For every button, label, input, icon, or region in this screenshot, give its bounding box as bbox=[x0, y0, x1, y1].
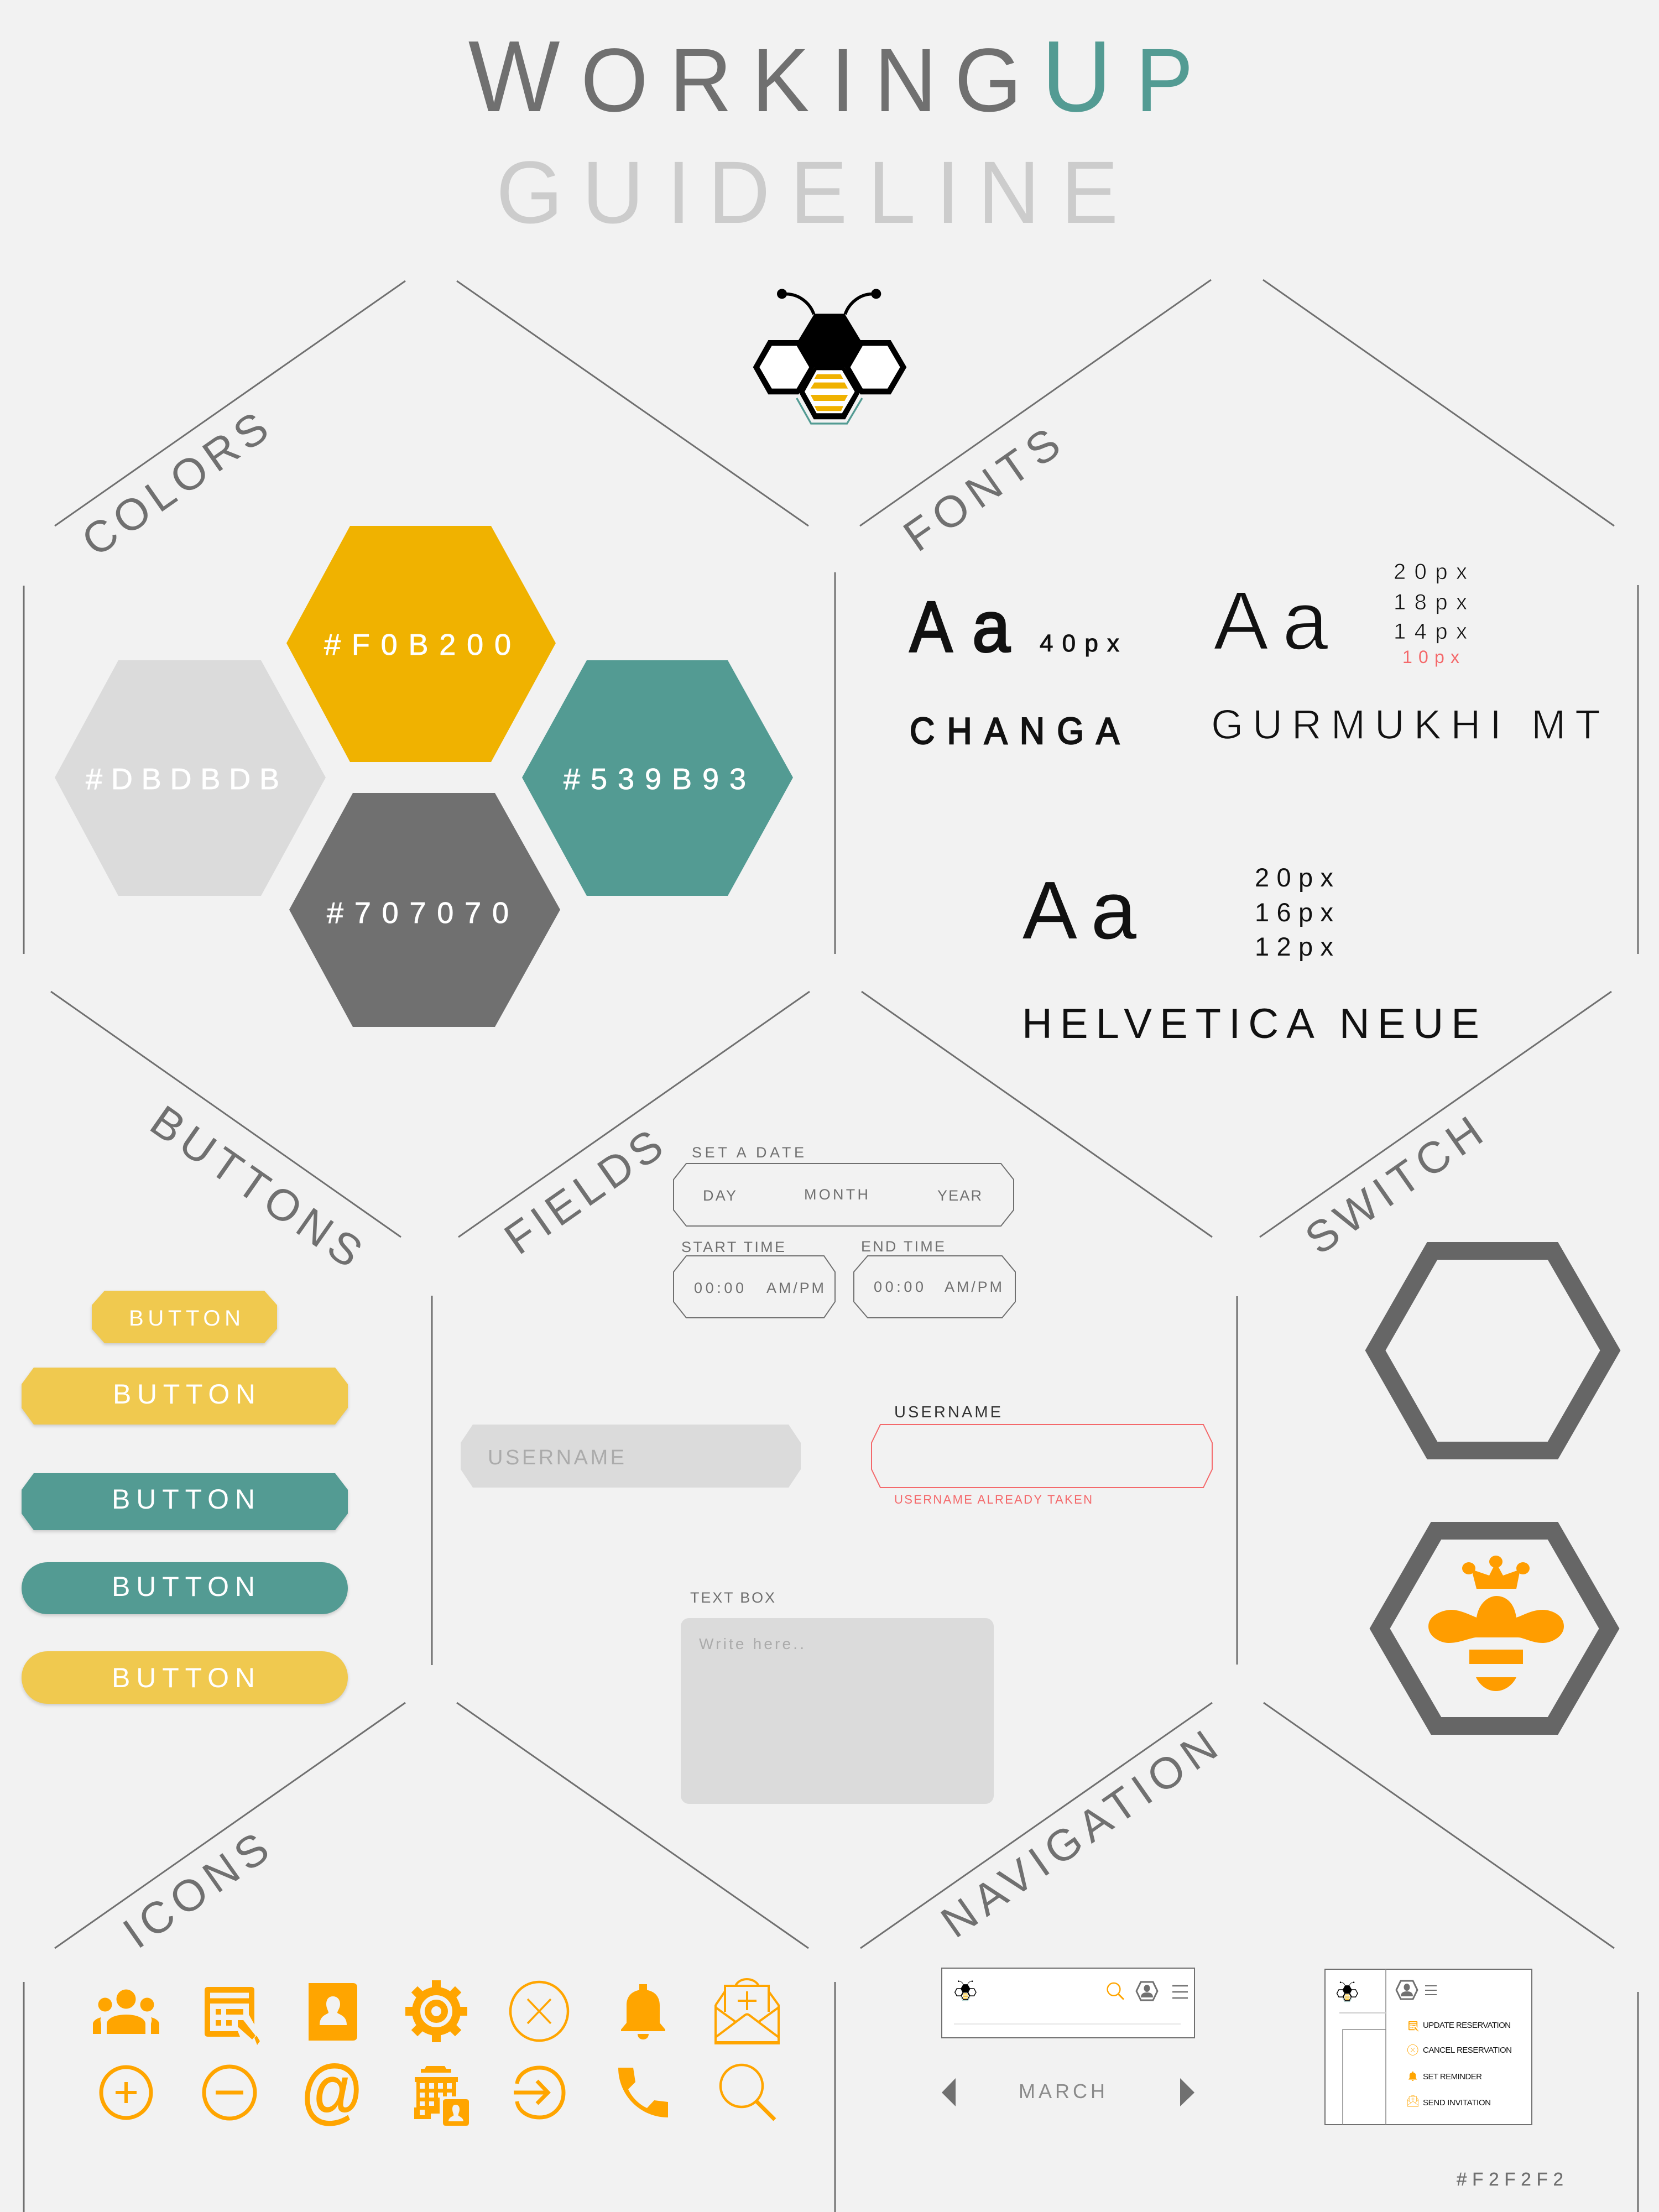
panel: icons bbox=[93, 1979, 780, 2131]
font sample: Gurmukhi MT: 20px bbox=[1394, 560, 1467, 584]
field: username error bbox=[872, 1404, 1212, 1506]
field: start time: AM/PM bbox=[766, 1280, 824, 1296]
icon: form edit bbox=[205, 1987, 260, 2045]
panel: colour swatches bbox=[55, 526, 793, 1027]
icon: minus circle bbox=[204, 2067, 255, 2119]
field: start time: 00:00 bbox=[694, 1280, 744, 1296]
button: large teal bbox=[22, 1473, 348, 1530]
icon: close circle bbox=[510, 1982, 568, 2041]
field: set a date bbox=[674, 1144, 1014, 1226]
heading: switch: SWITCH bbox=[1296, 1107, 1491, 1264]
field: text box: Write here.. bbox=[699, 1635, 804, 1652]
icon: queen bee bbox=[1428, 1556, 1564, 1691]
font sample: Gurmukhi MT: 10px bbox=[1402, 647, 1459, 667]
font sample: Helvetica Neue: Aa bbox=[1022, 865, 1137, 956]
icon: menu bbox=[1172, 1986, 1188, 1998]
nav: side menu mockup bbox=[1325, 1969, 1532, 2125]
icon: menu bbox=[1425, 1986, 1437, 1995]
button: large yellow: BUTTON bbox=[113, 1379, 255, 1410]
nav: month selector bbox=[942, 2078, 1194, 2106]
field: end time bbox=[854, 1238, 1015, 1318]
subtitle: Guideline bbox=[496, 143, 1118, 242]
icon: small logo bbox=[1337, 1981, 1358, 2002]
button: small yellow: BUTTON bbox=[129, 1306, 241, 1331]
field: set a date: YEAR bbox=[937, 1187, 982, 1204]
heading: fonts: FONTS bbox=[895, 419, 1069, 561]
heading: buttons: BUTTONS bbox=[142, 1096, 371, 1277]
font sample: Changa bbox=[910, 586, 1119, 752]
field: set a date: DAY bbox=[703, 1187, 736, 1204]
field: set a date: MONTH bbox=[804, 1186, 868, 1203]
menu item: send invitation bbox=[1407, 2095, 1491, 2107]
icon: search bbox=[721, 2065, 775, 2120]
button: large yellow bbox=[22, 1368, 348, 1425]
swatch: 539B93 bbox=[522, 660, 793, 896]
field: end time: AM/PM bbox=[945, 1279, 1002, 1295]
font sample: Gurmukhi MT: 18px bbox=[1394, 590, 1467, 614]
field: username filled bbox=[461, 1425, 801, 1488]
swatch: 707070: #707070 bbox=[327, 896, 509, 930]
swatch: F0B200: #F0B200 bbox=[324, 628, 511, 661]
icon: phone bbox=[618, 2068, 668, 2117]
heading: navigation: NAVIGATION bbox=[932, 1721, 1226, 1947]
menu item: set reminder: SET REMINDER bbox=[1423, 2072, 1482, 2081]
heading: fields: FIELDS bbox=[495, 1120, 671, 1264]
panel: fields bbox=[461, 1144, 1212, 1804]
button: large teal: BUTTON bbox=[112, 1484, 255, 1515]
font sample: Helvetica Neue: HELVETICA NEUE bbox=[1022, 1000, 1479, 1047]
button: teal pill: BUTTON bbox=[112, 1571, 255, 1602]
nav: month selector: MARCH bbox=[1019, 2080, 1105, 2103]
field: end time: 00:00 bbox=[874, 1279, 924, 1295]
subtitle: Guideline: I bbox=[936, 143, 960, 242]
font sample: Changa: a bbox=[972, 586, 1010, 667]
icon: user hexagon bbox=[1136, 1982, 1157, 2000]
menu item: update reservation: UPDATE RESERVATION bbox=[1423, 2021, 1511, 2030]
switch: on bbox=[1380, 1531, 1609, 1726]
subtitle: Guideline: L bbox=[868, 143, 916, 242]
logo: honeycomb bee bbox=[753, 289, 906, 424]
field: end time: END TIME bbox=[861, 1238, 945, 1255]
subtitle: Guideline: D bbox=[708, 143, 770, 242]
title: Working Up: N bbox=[874, 29, 937, 131]
button: teal pill bbox=[22, 1562, 348, 1614]
field: username filled: USERNAME bbox=[488, 1446, 624, 1469]
heading: colors: COLORS bbox=[73, 403, 277, 566]
button: small yellow bbox=[92, 1291, 277, 1343]
title: Working Up: P bbox=[1135, 29, 1193, 131]
subtitle: Guideline: U bbox=[582, 143, 644, 242]
background colour code: #F2F2F2 bbox=[1457, 2169, 1563, 2189]
font sample: Gurmukhi MT: GURMUKHI MT bbox=[1211, 701, 1600, 748]
switch: off bbox=[1375, 1251, 1610, 1451]
font sample: Helvetica Neue: 12px bbox=[1255, 932, 1333, 961]
field: text box bbox=[681, 1589, 994, 1804]
font sample: Gurmukhi MT: 14px bbox=[1394, 619, 1467, 644]
icon: small search bbox=[1108, 1983, 1124, 2000]
icon: settings gear bbox=[405, 1980, 467, 2042]
font sample: Changa: 40px bbox=[1040, 630, 1119, 657]
icon: small logo bbox=[954, 1980, 977, 2001]
panel: buttons bbox=[22, 1291, 348, 1704]
subtitle: Guideline: E bbox=[790, 143, 847, 242]
font sample: Gurmukhi MT bbox=[1211, 560, 1600, 748]
title: Working Up: W bbox=[468, 20, 560, 133]
field: start time bbox=[674, 1239, 835, 1318]
title: Working Up: R bbox=[670, 29, 732, 131]
title: Working Up: O bbox=[581, 29, 648, 131]
panel: switch bbox=[1375, 1251, 1610, 1726]
icon: user hexagon bbox=[1396, 1981, 1417, 1999]
swatch: DBDBDB: #DBDBDB bbox=[86, 763, 279, 796]
subtitle: Guideline: I bbox=[667, 143, 691, 242]
nav: header bar mockup bbox=[942, 1968, 1194, 2038]
title: Working Up: G bbox=[954, 29, 1022, 131]
panel: fonts bbox=[910, 560, 1600, 1047]
swatch: DBDBDB bbox=[55, 660, 326, 896]
icon: plus circle bbox=[101, 2067, 151, 2118]
field: username error: USERNAME ALREADY TAKEN bbox=[894, 1493, 1092, 1506]
button: yellow pill: BUTTON bbox=[112, 1662, 255, 1693]
swatch: 539B93: #539B93 bbox=[564, 763, 746, 796]
title: Working Up: I bbox=[831, 29, 855, 131]
icon: at sign: @ bbox=[300, 2051, 364, 2131]
icon: contact card bbox=[309, 1983, 357, 2041]
font sample: Helvetica Neue: 20px bbox=[1255, 863, 1333, 892]
title: Working Up: U bbox=[1042, 20, 1112, 133]
icon: arrow circle bbox=[514, 2068, 564, 2117]
menu item: send invitation: SEND INVITATION bbox=[1423, 2098, 1491, 2107]
icon: building contact bbox=[414, 2066, 471, 2127]
swatch: F0B200 bbox=[286, 526, 556, 762]
swatch: 707070 bbox=[289, 793, 560, 1027]
icon: bell bbox=[621, 1984, 665, 2039]
font sample: Helvetica Neue: 16px bbox=[1255, 898, 1333, 927]
icon: envelope invitation bbox=[714, 1979, 780, 2044]
subtitle: Guideline: G bbox=[496, 143, 563, 242]
field: set a date: SET A DATE bbox=[692, 1144, 804, 1161]
subtitle: Guideline: E bbox=[1061, 143, 1118, 242]
field: username error: USERNAME bbox=[894, 1404, 1001, 1421]
font sample: Helvetica Neue bbox=[1022, 863, 1479, 1047]
title: Working Up bbox=[468, 20, 1193, 133]
panel: navigation bbox=[942, 1968, 1532, 2125]
heading: icons: ICONS bbox=[114, 1823, 278, 1958]
button: yellow pill bbox=[22, 1651, 348, 1704]
menu item: cancel reservation: CANCEL RESERVATION bbox=[1423, 2046, 1512, 2055]
title: Working Up: K bbox=[752, 29, 810, 131]
subtitle: Guideline: N bbox=[978, 143, 1040, 242]
font sample: Gurmukhi MT: Aa bbox=[1213, 574, 1329, 667]
icon: people bbox=[93, 1990, 159, 2034]
field: text box: TEXT BOX bbox=[690, 1589, 775, 1606]
font sample: Changa: CHANGA bbox=[910, 710, 1119, 752]
font sample: Changa: A bbox=[910, 587, 952, 667]
field: start time: START TIME bbox=[681, 1239, 785, 1255]
